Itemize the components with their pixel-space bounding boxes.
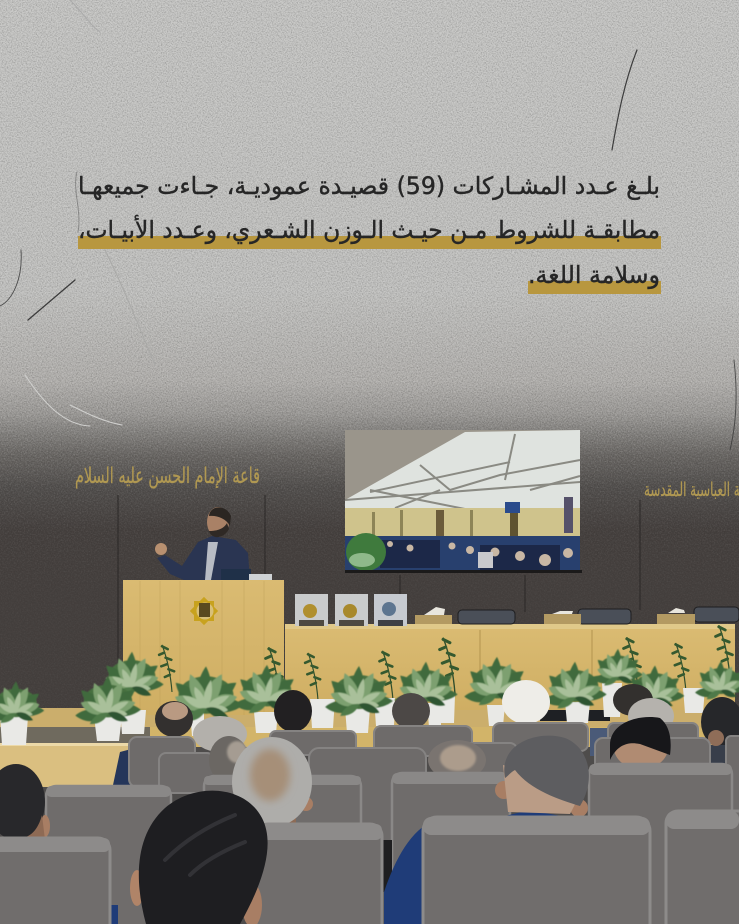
headline text: بلـغ عـدد المشـاركات (59) قصيـدة عموديـة، جـاءت جميعهـا — [78, 172, 660, 200]
screen plant — [346, 533, 386, 571]
bald man — [232, 737, 313, 830]
glasses man — [613, 684, 653, 716]
headline text — [78, 172, 660, 289]
audience: near people — [0, 736, 589, 924]
wall calligraphy left: قاعة الإمام الحسن عليه السلام — [75, 464, 260, 489]
speaker head — [207, 507, 229, 537]
blue jacket man — [384, 736, 589, 924]
highlight: line 3 — [528, 281, 661, 294]
podium — [123, 580, 284, 715]
speaker at podium — [155, 507, 250, 580]
stage front — [0, 702, 739, 787]
second row chairs — [159, 736, 739, 873]
speaker tie and shirt — [205, 542, 218, 580]
grey head mid left — [209, 736, 249, 784]
grey-haired man — [628, 698, 674, 734]
screen audience — [345, 536, 580, 570]
back table — [285, 624, 735, 710]
paper scratches — [0, 0, 736, 450]
left head — [0, 764, 50, 840]
blue sleeve front left — [108, 905, 118, 924]
audience: far row people — [113, 680, 739, 785]
second row people — [209, 717, 671, 784]
screen showing hall photo — [345, 430, 582, 573]
background: paper texture fading to hall wall — [0, 0, 739, 730]
speaker jacket — [157, 536, 250, 580]
white turban — [502, 680, 550, 724]
plant foliage — [0, 649, 739, 728]
pants dark — [378, 840, 392, 892]
chairs behind table — [458, 607, 739, 624]
white pots — [0, 683, 705, 745]
front chair rims — [0, 811, 739, 852]
tan grey head — [428, 740, 486, 780]
award plaques — [295, 594, 407, 626]
screen ceiling lines — [345, 434, 580, 510]
cap man — [614, 727, 668, 769]
potted plants row — [0, 625, 739, 745]
screen back wall — [345, 508, 580, 538]
audience: front chairs — [0, 811, 739, 924]
headline text: وسلامة اللغة. — [528, 261, 660, 289]
highlight: line 2 — [78, 236, 661, 249]
speaker raised hand — [155, 543, 167, 555]
screen sign — [505, 502, 520, 513]
book on podium — [249, 574, 272, 580]
dark-haired man front — [130, 791, 268, 924]
podium emblem — [190, 597, 218, 625]
right dark man — [701, 697, 739, 747]
laptop on podium — [221, 569, 251, 580]
navy jacket left — [113, 748, 135, 785]
balding head — [155, 701, 193, 737]
headline text: مطابقـة للشروط مـن حيـث الـوزن الشـعري، وعـدد الأبيـات، — [78, 215, 660, 244]
dark head — [274, 690, 312, 732]
third row chairs — [46, 764, 732, 924]
grey-haired man front of far row — [193, 716, 247, 752]
floor between seats — [110, 790, 739, 924]
far row chairs — [129, 723, 698, 787]
grey head — [392, 693, 430, 729]
tissue boxes — [415, 607, 695, 624]
third row chair rims — [46, 764, 732, 797]
wall panel grooves — [118, 495, 640, 680]
